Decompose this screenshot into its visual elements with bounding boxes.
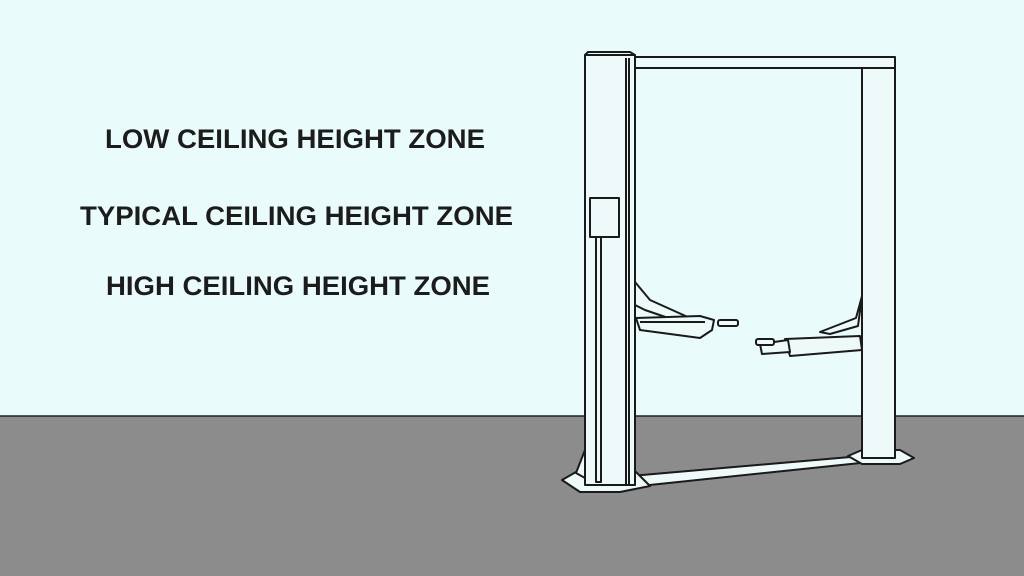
floor crossbar: [630, 456, 870, 486]
two-post lift: [562, 52, 914, 492]
zone labels: [80, 124, 513, 301]
label: high ceiling: HIGH CEILING HEIGHT ZONE: [106, 271, 490, 301]
left arm: [635, 282, 738, 338]
label: typical ceiling: TYPICAL CEILING HEIGHT ZONE: [80, 201, 513, 231]
wall background: [0, 0, 1024, 416]
control box: [590, 198, 619, 237]
floor: [0, 416, 1024, 576]
right base plate: [848, 450, 914, 464]
top beam: [635, 57, 895, 68]
right post: [862, 68, 895, 458]
label: low ceiling: LOW CEILING HEIGHT ZONE: [105, 124, 485, 154]
left base plate: [562, 472, 650, 492]
right arm: [756, 296, 862, 356]
left post: [585, 55, 635, 485]
